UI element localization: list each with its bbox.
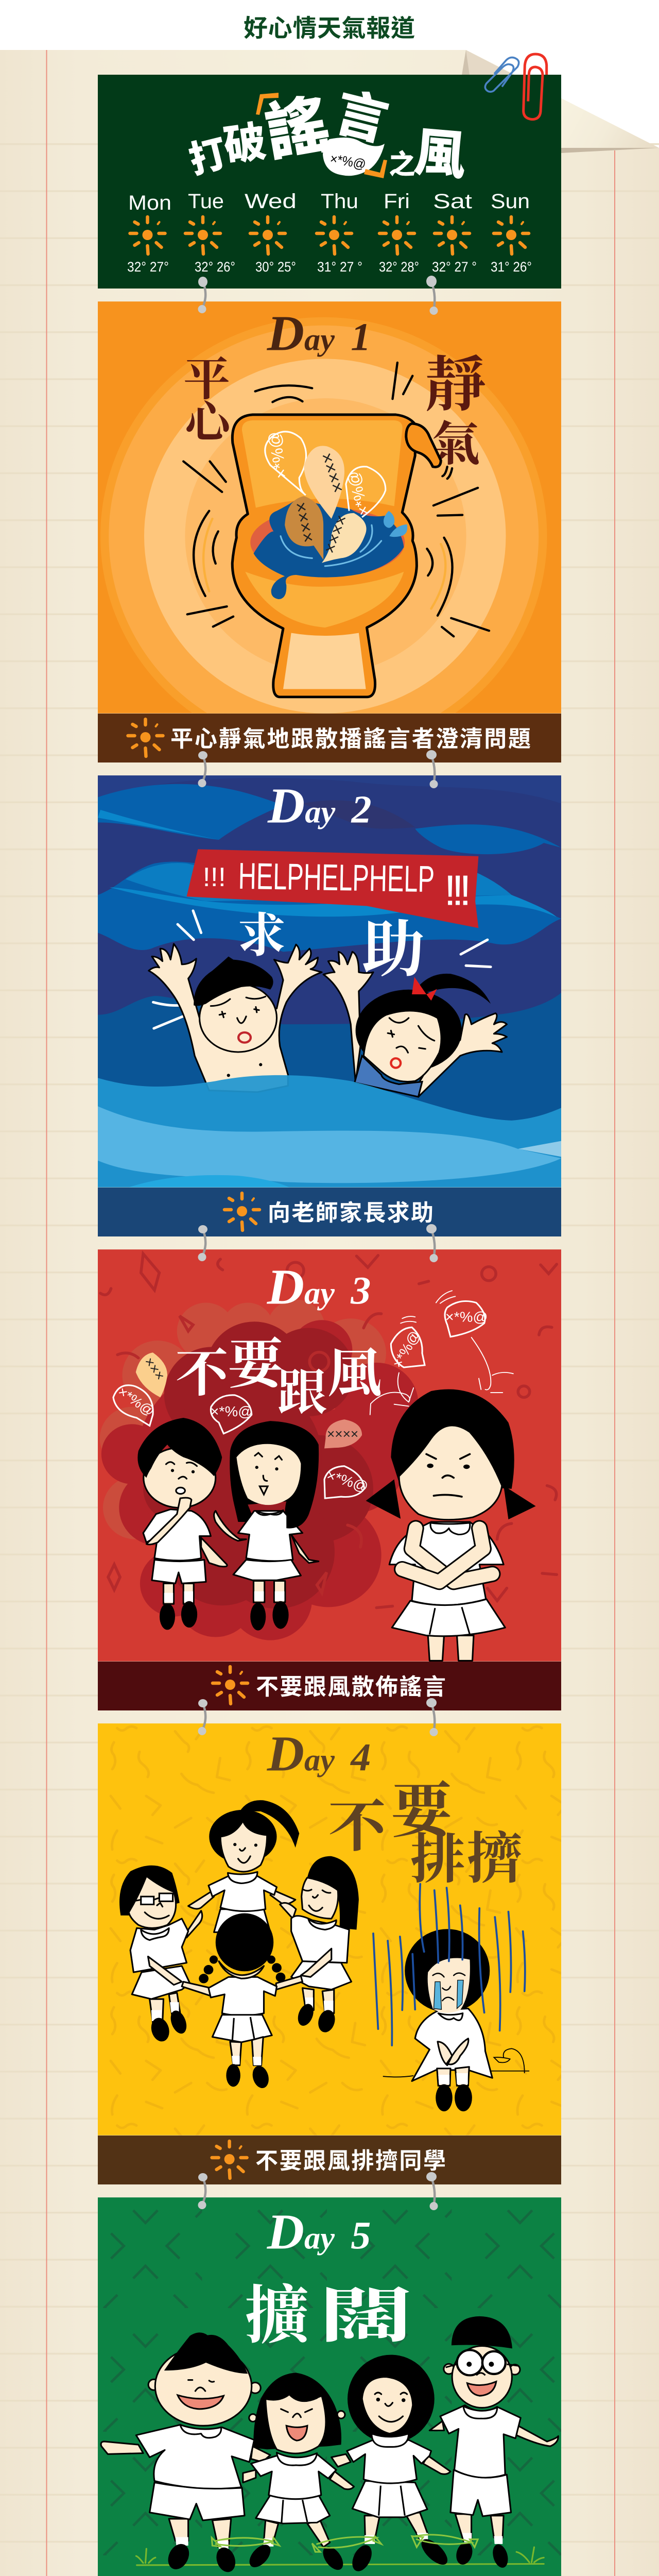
day 2 heading: Day2 (267, 778, 372, 834)
word: 擴闊: 闊 (319, 2283, 413, 2350)
caption: day 1: 平心靜氣地跟散播謠言者澄清問題 (170, 726, 531, 752)
girl refusing with crossed arms (366, 1389, 536, 1660)
word: 靜氣: 氣 (432, 419, 480, 471)
red banner: !!! (444, 867, 472, 914)
temperatures (127, 259, 532, 275)
panel: weather header (98, 75, 561, 289)
caption: day 2 (98, 1188, 561, 1236)
panel: day 3 (98, 1249, 561, 1662)
connecting rings (198, 276, 438, 2210)
caption: day 4 (98, 2136, 561, 2184)
green ankle ties (212, 2535, 478, 2552)
word: 不要排擠 (328, 1779, 523, 1890)
weekday labels: Wed (245, 190, 297, 213)
girl gossiping (214, 1421, 319, 1631)
weekday labels: Sun (491, 190, 530, 213)
panel: day 5 (98, 2197, 561, 2576)
rumour bubbles: ×*%@ (211, 1403, 253, 1420)
temperatures: 31° 26° (491, 259, 532, 275)
folded page corner (462, 50, 659, 153)
panel: day 2 (98, 775, 561, 1188)
headline: ×*%@ (329, 150, 367, 172)
weekday labels (128, 190, 530, 214)
day 3 heading: Day3 (267, 1259, 371, 1315)
girl: back view (182, 1913, 303, 2090)
panel: day 4 (98, 1723, 561, 2136)
weekday labels: Thu (321, 190, 358, 213)
green background with chevrons (98, 2197, 561, 2576)
word: 平心: 平 (183, 355, 230, 405)
title: 好心情天氣報道 (244, 14, 415, 42)
rumour bubbles: ×××× (327, 1426, 358, 1442)
caption: day 3: 不要跟風散佈謠言 (256, 1674, 446, 1700)
header background (98, 75, 561, 289)
girl (323, 952, 507, 1097)
rumour bubbles: ××× (141, 1354, 168, 1383)
yellow background with squiggles (98, 1723, 561, 2136)
boy with hand on mouth (137, 1418, 227, 1630)
day 5 heading: Day5 (267, 2204, 371, 2260)
rumour speech bubbles: ×*%@ (264, 430, 291, 480)
word: 不要跟風: 要 (228, 1335, 285, 1395)
rumour speech bubbles: ×××× (320, 512, 352, 556)
headline (185, 83, 469, 185)
word: 不要跟風: 跟 (278, 1366, 327, 1420)
day 1 background with rings (98, 301, 561, 755)
temperatures: 32° 28° (379, 259, 419, 275)
word: 擴闊: 擴 (245, 2281, 316, 2351)
girl: with glasses (119, 1866, 202, 2043)
weather suns (130, 217, 529, 254)
word: 擴闊 (245, 2281, 413, 2351)
rumour speech bubbles: ×××× (316, 450, 348, 496)
headline: 謠 (261, 89, 335, 169)
weekday labels: Sat (433, 190, 472, 213)
panel: day 1 (98, 301, 561, 755)
word: 不要排擠: 排 (410, 1829, 465, 1889)
rumour speech bubbles: ×××× (290, 500, 318, 545)
word: 求: 求 (237, 910, 286, 962)
rumour bubbles: ×*%@ (324, 1467, 370, 1496)
red banner: !!! (203, 862, 226, 892)
temperatures: 30° 25° (255, 259, 296, 275)
word: 靜氣 (426, 353, 486, 471)
word: 不要跟風 (176, 1335, 381, 1420)
rumour speech bubbles (264, 430, 386, 563)
word: 不要跟風: 風 (327, 1345, 381, 1403)
crying girl with gloom lines (373, 1884, 529, 2111)
girl: right of circle (280, 1856, 359, 2034)
rumour bubbles: ×*%@ (115, 1383, 158, 1419)
temperatures: 32° 27 ° (432, 259, 477, 275)
caption: day 1 (98, 714, 561, 762)
sea background (98, 775, 561, 1188)
boy (149, 944, 322, 1092)
red background and clouds (98, 1249, 561, 1662)
rumour speech bubbles: ×*%@ (343, 469, 373, 518)
word: 不要排擠: 擠 (466, 1829, 523, 1890)
temperatures: 32° 26° (195, 259, 235, 275)
toilet (232, 415, 417, 697)
temperatures: 32° 27° (127, 259, 169, 275)
word: 不要排擠: 不 (328, 1796, 388, 1859)
ground and grass (136, 2547, 544, 2565)
motion lines (183, 363, 489, 636)
word: 平心: 心 (185, 398, 235, 447)
headline: 言 (330, 83, 393, 151)
rumour bubbles: ×*%@ (389, 1328, 423, 1370)
headline: 破 (221, 118, 269, 171)
kid 2: girl with bangs (246, 2372, 354, 2573)
temperatures: 31° 27 ° (317, 259, 362, 275)
red banner (186, 849, 478, 928)
word: 助: 助 (362, 917, 425, 985)
kid 1: big boy (101, 2332, 270, 2574)
rumour bubbles: ×*%@ (445, 1309, 488, 1325)
weekday labels: Tue (188, 190, 224, 213)
word: 靜氣: 靜 (426, 353, 486, 418)
headline: 風 (412, 124, 469, 185)
word: 不要跟風: 不 (176, 1345, 231, 1403)
word: 不要排擠: 要 (391, 1779, 454, 1845)
toilet handle (406, 423, 441, 467)
headline: 之 (389, 150, 415, 180)
foreground water (98, 1075, 561, 1188)
icon: paper clips (485, 54, 547, 120)
headline: 打 (185, 132, 231, 182)
word: 平心 (183, 355, 235, 447)
motion lines (153, 911, 491, 1028)
kid 3: long-hair girl (332, 2355, 452, 2574)
caption: day 2: 向老師家長求助 (268, 1200, 433, 1226)
weekday labels: Mon (128, 192, 171, 214)
day 4 heading: Day4 (267, 1726, 371, 1782)
caption: day 4: 不要跟風排擠同學 (255, 2148, 446, 2174)
red banner: HELPHELPHELP (238, 855, 435, 900)
day 1 heading: Day1 (267, 306, 371, 361)
caption: day 3 (98, 1662, 561, 1710)
rumour bubbles (113, 1291, 513, 1498)
kid 4: boy with glasses (429, 2316, 558, 2569)
weekday labels: Fri (384, 190, 410, 213)
girl: top of circle (188, 1800, 299, 1932)
